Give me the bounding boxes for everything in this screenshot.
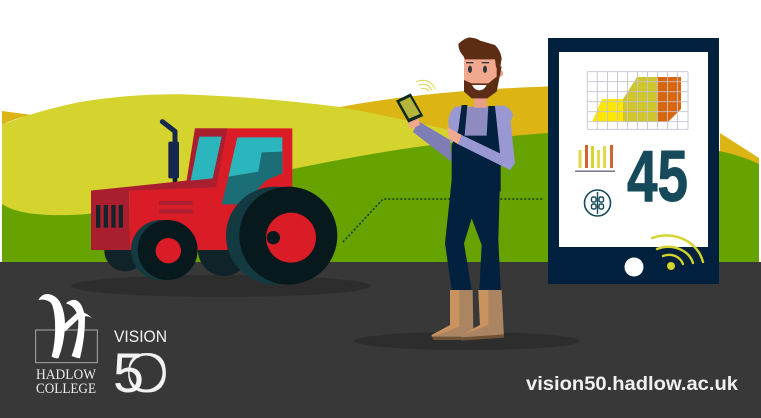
Vision 50 logo (113, 328, 169, 404)
cab interior (222, 152, 282, 204)
right boot (462, 290, 504, 341)
tablet wifi icon (652, 235, 703, 270)
hand holding phone (407, 117, 420, 129)
area chart (587, 72, 688, 129)
face (464, 58, 497, 88)
side window (228, 137, 282, 177)
farmer torso (413, 105, 515, 192)
tablet screen (559, 52, 708, 247)
college name: COLLEGE (36, 381, 96, 397)
wheat icon (584, 190, 610, 216)
rolling hills (2, 86, 759, 264)
shirt chest (466, 107, 489, 137)
front wheel (131, 220, 198, 280)
ground (0, 262, 761, 418)
windshield (191, 137, 222, 181)
mini bar chart (575, 145, 615, 172)
tractor shadow (71, 275, 371, 297)
phone signal (416, 80, 435, 91)
hood top and cab frame (91, 128, 227, 191)
shirt (448, 107, 513, 142)
rear far wheels (104, 224, 250, 276)
Vision 50 logo: 0 (125, 341, 169, 404)
Vision 50 logo: VISION (114, 328, 167, 346)
overalls (452, 105, 501, 192)
neck (474, 95, 487, 108)
person shadow (354, 332, 580, 350)
arm (458, 106, 515, 170)
ear (496, 70, 503, 77)
dotted connector line (343, 199, 543, 242)
logo box and H mark (36, 294, 97, 363)
beard (464, 67, 502, 98)
eyes (466, 62, 489, 73)
college name (36, 367, 97, 397)
tractor (91, 122, 337, 285)
tractor body (129, 128, 292, 250)
front grille panel (91, 187, 129, 250)
rear wheel (226, 187, 337, 285)
Hadlow College logo (36, 294, 97, 397)
college name: HADLOW (36, 367, 97, 383)
tablet (548, 38, 719, 284)
home button (624, 258, 644, 276)
big number 45: 45 (627, 137, 688, 217)
mouth (472, 85, 487, 90)
farmer head and phone (396, 37, 503, 129)
website URL: vision50.hadlow.ac.uk (526, 374, 738, 395)
smartphone (396, 93, 423, 123)
farmer legs and boots (432, 180, 504, 341)
left lower sleeve (413, 121, 452, 162)
Vision 50 logo: 5 (113, 341, 144, 404)
exhaust pipe (162, 122, 179, 184)
hood lines (159, 201, 193, 213)
left boot (432, 290, 473, 340)
trousers (445, 180, 501, 290)
hair (458, 37, 502, 69)
grille vents (96, 205, 123, 228)
pointing hand (447, 127, 462, 144)
